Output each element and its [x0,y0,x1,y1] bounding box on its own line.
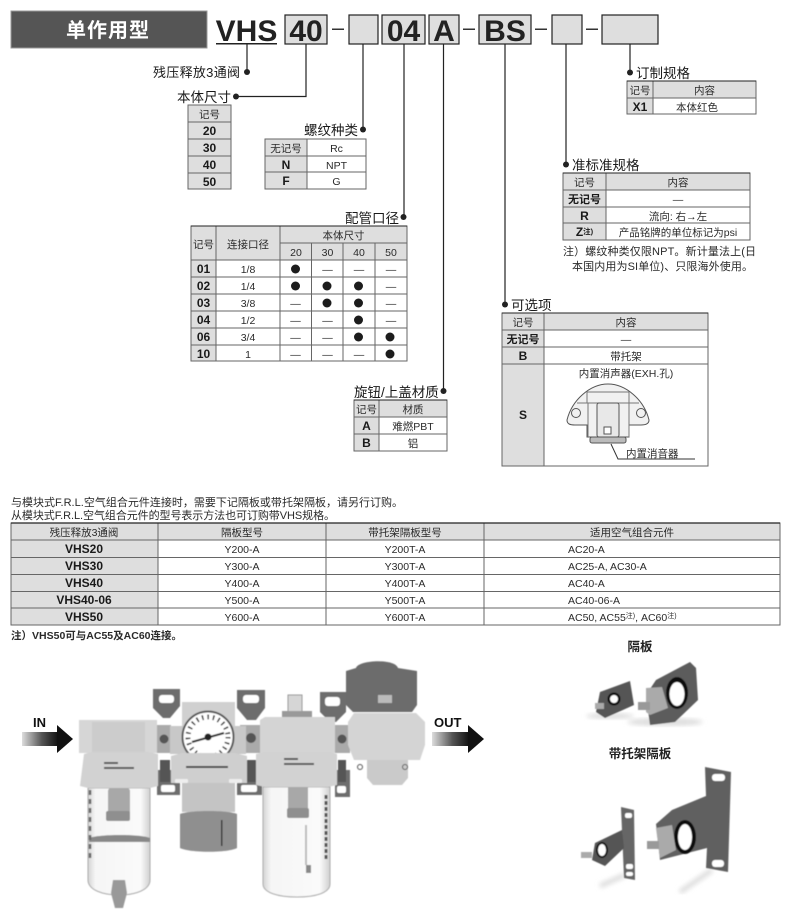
heading: 带托架隔板: 带托架隔板 [609,746,672,761]
panel: 订制规格: X1 [633,100,648,114]
panel: 配管口径: — [354,264,365,276]
panel: 可选项: B [519,349,528,363]
diagram: built-in silencer [567,384,695,459]
panel: 可选项: 无记号 [506,333,540,346]
panel: 可选项: 记号 [512,317,534,329]
photo: F.R.L. air unit [79,661,425,908]
panel: 配管口径: — [322,332,333,344]
panel: 准标准规格: 准标准规格 [572,158,640,173]
panel: 螺纹种类: NPT [326,160,348,172]
table: VHS spacers: 带托架隔板型号 [368,526,442,539]
table: VHS spacers: VHS30 [65,559,103,573]
panel: 准标准规格: 无记号 [568,193,601,206]
panel: 配管口径: — [290,315,301,327]
panel: 准标准规格: 流向: 右→左 [649,210,707,223]
panel: 配管口径: 02 [197,279,210,293]
panel: 螺纹种类: F [282,174,290,188]
panel: 旋钮/上盖材质: 难燃PBT [392,420,434,433]
joints [156,725,350,753]
panel: 准标准规格 [563,44,750,240]
table: VHS spacers: Y300T-A [385,561,425,573]
title: 单作用型: 单作用型 [66,19,150,42]
panel: 配管口径: 40 [353,247,365,259]
panel: 准标准规格: Z [576,225,583,239]
table: VHS spacers: Y600-A [224,612,260,624]
table: VHS spacers: Y200-A [224,544,260,556]
left filter [88,788,150,895]
leader: 残压释放3通阀: 残压释放3通阀 [153,65,240,80]
table: VHS spacers: VHS40 [65,576,103,590]
panel: 配管口径: — [386,281,397,293]
panel: 本体尺寸: 30 [203,141,216,155]
panel: 配管口径: 本体尺寸 [322,229,364,242]
panel: 配管口径: 03 [197,296,210,310]
arrow: OUT [432,715,484,753]
model code row: VHS [216,15,277,48]
panel: 旋钮/上盖材质: B [362,436,371,450]
panel: 配管口径: — [322,315,333,327]
text block: intro [11,495,403,522]
panel: 配管口径: 06 [197,330,210,344]
panel: 可选项: — [621,334,632,346]
panel: 配管口径: 1/2 [241,315,255,327]
panel: 准标准规格: 产品铭牌的单位标记为psi [619,226,737,239]
panel: 准标准规格: 注) [583,226,594,236]
panel: 配管口径: — [322,264,333,276]
panel: 配管口径: — [290,349,301,361]
panel: 订制规格: 本体红色 [676,101,718,114]
table: VHS spacers: AC25-A, AC30-A [568,561,647,573]
panel: 旋钮/上盖材质: 记号 [356,404,377,416]
brackets [153,689,350,797]
table: VHS spacers: 注) [626,611,635,620]
note: 螺纹种类: 本国内用为SI单位)、只限海外使用。 [572,259,753,273]
panel: 配管口径: 20 [290,247,302,259]
panel: 本体尺寸: 40 [203,158,216,172]
panel: 本体尺寸 [177,44,306,189]
table: VHS spacers: Y200T-A [385,544,425,556]
panel: 准标准规格: 记号 [574,177,595,189]
panel: 配管口径: 1/8 [241,264,255,276]
table: VHS spacers: Y300-A [224,561,260,573]
panel: 配管口径: 10 [197,347,210,361]
panel: 可选项: S [519,408,527,422]
leader: 残压释放3通阀 [153,44,250,80]
panel: 可选项: 可选项 [511,298,552,313]
table: VHS spacers: Y400T-A [385,578,425,590]
table: VHS spacers: AC50, AC55 [568,612,626,624]
panel: 螺纹种类: 螺纹种类 [304,123,358,138]
panel: 配管口径: 50 [385,247,397,259]
model code row: 40 [289,15,323,48]
footnote: 注）VHS50可与AC55及AC60连接。 [11,629,182,642]
panel: 订制规格: 内容 [694,84,715,97]
text block: intro: 从模块式F.R.L.空气组合元件的型号表示方法也可订购带VHS规格。 [11,508,335,522]
panel: 配管口径: 04 [197,313,210,327]
panel: 可选项: 内置消音器 [626,447,679,460]
panel: 配管口径: — [290,298,301,310]
panel: 配管口径: — [290,332,301,344]
panel: 旋钮/上盖材质: A [362,419,371,433]
table: VHS spacers: Y500-A [224,595,260,607]
panel: 配管口径: — [386,315,397,327]
model code row [216,15,658,48]
panel: 旋钮/上盖材质: 铝 [408,437,418,450]
panel: 配管口径: — [386,264,397,276]
table: VHS spacers [11,523,780,625]
table: VHS spacers: Y500T-A [385,595,425,607]
table: VHS spacers: VHS40-06 [56,593,112,607]
panel: 旋钮/上盖材质: 旋钮/上盖材质 [354,385,439,400]
panel: 配管口径: 配管口径 [345,211,399,226]
panel: 螺纹种类: Rc [330,143,343,155]
table: VHS spacers: 注) [667,611,677,620]
heading: 隔板: 隔板 [627,639,653,654]
panel: 配管口径: 01 [197,262,210,276]
table: VHS spacers: AC40-A [568,578,605,590]
table: VHS spacers: VHS50 [65,610,103,624]
photo: spacers with bracket [581,767,731,892]
panel: 旋钮/上盖材质: 材质 [402,403,424,416]
panel: 本体尺寸: 记号 [199,109,220,121]
model code row: 04 [387,15,420,48]
panel: 配管口径: 3/4 [241,332,255,344]
panel: 配管口径: 1/4 [241,281,255,293]
note: 螺纹种类 [563,244,756,273]
lubricator [263,787,330,897]
panel: 配管口径: 连接口径 [227,238,269,251]
text block: intro: 与模块式F.R.L.空气组合元件连接时，需要下记隔板或带托架隔板，请另行订购。 [11,495,403,509]
arrow: IN [22,715,73,753]
panel: 配管口径: 3/8 [241,298,255,310]
table: VHS spacers: AC20-A [568,544,605,556]
model code row: A [433,15,455,48]
panel: 准标准规格: — [673,194,684,206]
regulator [182,702,235,754]
panel: 螺纹种类: 无记号 [270,143,302,155]
table: VHS spacers: , AC60 [635,612,667,624]
panel: 配管口径: 记号 [193,239,214,251]
panel: 准标准规格: 内容 [668,176,689,189]
panel: 配管口径: 30 [322,247,333,259]
dark-knob valve [346,661,417,712]
table: VHS spacers: 适用空气组合元件 [590,526,674,539]
panel: 可选项: 带托架 [610,350,642,363]
panel: 配管口径: — [386,298,397,310]
arrow: OUT: OUT [434,715,462,730]
model code row: BS [484,15,526,48]
panel: 本体尺寸: 50 [203,175,216,189]
panel: 订制规格: 订制规格 [636,66,690,81]
panel: 本体尺寸: 本体尺寸 [177,90,231,105]
panel: 螺纹种类: N [282,158,290,172]
arrow: IN: IN [33,715,46,730]
panel: 配管口径: 1 [245,349,251,361]
photo: spacers [586,662,703,726]
title: 单作用型 [11,11,207,48]
panel: 本体尺寸: 20 [203,124,216,138]
panel: 配管口径 [191,44,407,361]
panel: 配管口径: — [322,349,333,361]
panel: 可选项: 内容 [616,316,637,329]
table: VHS spacers: AC40-06-A [568,595,620,607]
panel: 旋钮/上盖材质 [354,44,447,451]
table: VHS spacers: Y400-A [224,578,260,590]
note: 螺纹种类: 注）螺纹种类仅限NPT。新计量法上(日 [563,244,756,258]
table: VHS spacers: 残压释放3通阀 [50,526,118,539]
table: VHS spacers: 隔板型号 [221,526,263,539]
panel: 螺纹种类 [265,44,366,189]
panel: 螺纹种类: G [332,176,341,188]
table: VHS spacers: Y600T-A [385,612,425,624]
panel: 可选项: 内置消声器(EXH.孔) [579,367,673,380]
panel: 准标准规格: R [580,209,589,223]
panel: 可选项 [502,44,708,466]
table: VHS spacers: VHS20 [65,542,103,556]
panel: 订制规格: 记号 [630,85,650,97]
panel: 配管口径: — [354,349,365,361]
panel: 订制规格 [627,44,756,114]
